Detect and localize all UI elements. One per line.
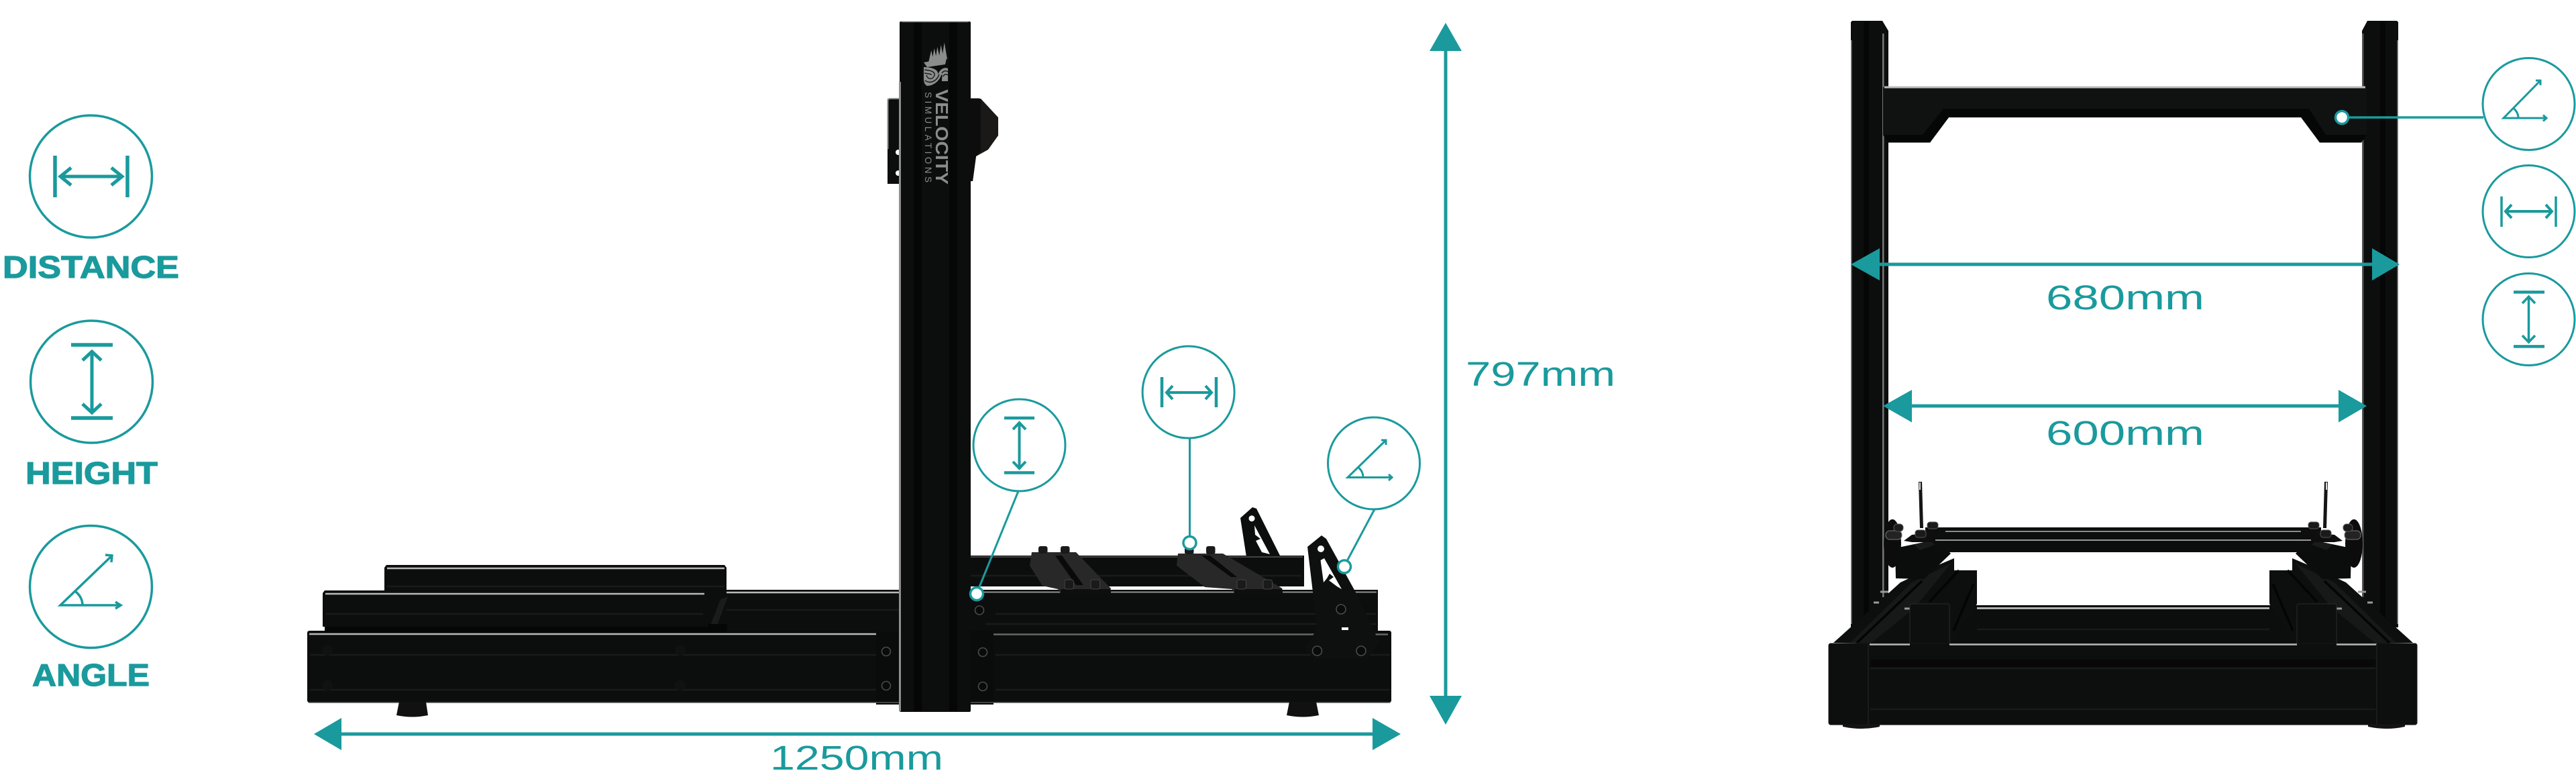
callout: distance at side view xyxy=(1142,346,1234,549)
foot left xyxy=(396,702,428,717)
upper block xyxy=(1895,538,1951,579)
dimension arrow: 797mm xyxy=(1430,23,1615,725)
callout: angle at front view xyxy=(2336,58,2575,150)
dimension arrow: 797mm: 797mm xyxy=(1466,355,1615,393)
back bracket xyxy=(1240,507,1281,557)
dimension arrow: 680mm xyxy=(1851,248,2400,317)
panel: front view rig xyxy=(1829,21,2417,729)
foot right xyxy=(1287,702,1319,717)
dark strip under middle rail xyxy=(325,624,727,632)
legend item: distance xyxy=(3,115,179,284)
front bracket xyxy=(1305,535,1379,659)
front block xyxy=(1910,604,1949,645)
lower rail xyxy=(307,631,1391,705)
floor rail xyxy=(1833,558,1977,644)
top crossbar xyxy=(1883,87,2367,142)
slider 1 xyxy=(1030,546,1111,594)
right upright xyxy=(2362,21,2398,627)
panel: side view rig xyxy=(307,21,1391,717)
feet xyxy=(1843,725,2405,729)
panel: legend xyxy=(3,115,179,692)
slider 2 xyxy=(1177,546,1283,594)
upper cross rails xyxy=(1935,527,2311,552)
legend item: angle xyxy=(30,526,152,692)
middle rail right xyxy=(966,590,1378,631)
legend item: angle: ANGLE xyxy=(32,658,150,692)
brand logo xyxy=(923,42,952,185)
knobs xyxy=(1927,522,1938,529)
brand logo: SIMULATIONS xyxy=(923,92,933,183)
small rail highlights xyxy=(1874,592,1910,609)
wheel mount bracket xyxy=(888,99,998,184)
screws xyxy=(322,605,1366,691)
icon: height at front view xyxy=(2483,274,2575,365)
brand logo: VELOCITY xyxy=(932,89,952,185)
upper rear rail right xyxy=(966,556,1304,586)
legend item: height xyxy=(25,321,158,490)
top plate xyxy=(1904,527,1951,542)
dimension arrow: 600mm: 600mm xyxy=(2046,414,2204,452)
rear rail left xyxy=(701,590,902,631)
middle rail left xyxy=(323,590,708,627)
callout: angle at side view xyxy=(1328,417,1419,573)
icon: distance at front view xyxy=(2483,165,2575,258)
right floor rails and blocks xyxy=(2269,482,2413,645)
back cross rail xyxy=(1945,605,2301,644)
legend item: height: HEIGHT xyxy=(25,456,158,490)
side bracket xyxy=(1884,519,1901,568)
legend item: distance: DISTANCE xyxy=(3,250,179,284)
dimension arrow: 600mm xyxy=(1883,390,2367,452)
dimension arrow: 1250mm xyxy=(314,718,1401,777)
dimension arrow: 1250mm: 1250mm xyxy=(770,739,943,777)
column xyxy=(899,21,971,712)
pedal plate pin xyxy=(1919,482,1923,528)
callout: height at side view xyxy=(970,399,1065,600)
left upright xyxy=(1851,21,1888,627)
top rail left xyxy=(384,565,727,594)
left floor rails and blocks xyxy=(1833,482,1977,645)
dimension arrow: 680mm: 680mm xyxy=(2046,278,2204,317)
base frame xyxy=(1829,643,2417,725)
